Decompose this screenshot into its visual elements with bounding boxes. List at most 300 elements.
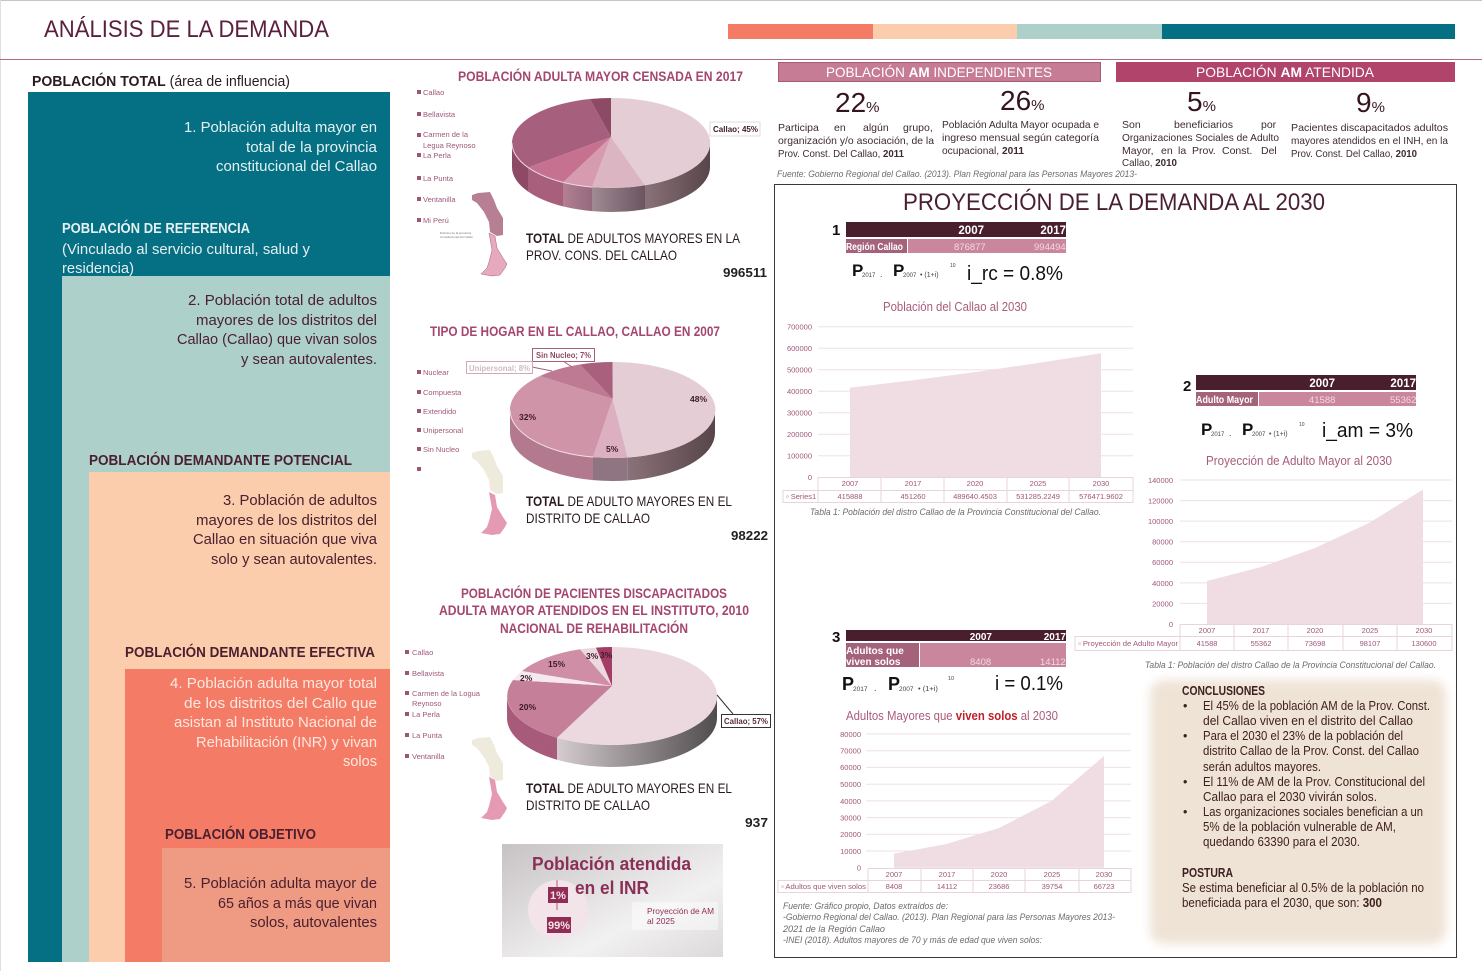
conclusions list: Para el 2030 el 23% de la población del: [1203, 729, 1403, 743]
stat 22%: grupo,: [903, 122, 933, 134]
area chart 1: 2020: [967, 479, 983, 488]
map of Callao: Distritos de la provincia: [440, 231, 471, 235]
legend: Extendido: [423, 407, 456, 416]
area chart 3: 14112: [937, 882, 957, 891]
data labels: 15%: [548, 659, 565, 669]
legend: La Punta: [423, 174, 454, 183]
formula 2: .: [1229, 428, 1232, 438]
heading: población total: POBLACIÓN TOTAL (área de influencia): [32, 72, 290, 90]
banner: POBLACIÓN AM ATENDIDA: [1196, 64, 1375, 80]
chart title: POBLACIÓN DE PACIENTES DISCAPACITADOS: [461, 586, 727, 601]
conclusions list: •: [1183, 729, 1187, 743]
area chart 2: 140000: [1148, 476, 1173, 485]
block: población demandante efectiva: POBLACIÓN OBJETIVO: [165, 825, 316, 843]
legend: Callao: [423, 88, 444, 97]
area chart 3: 8408: [886, 882, 902, 891]
legend: La Perla: [412, 710, 441, 719]
stat 5%: [1122, 86, 1279, 169]
formula 1: 10: [950, 263, 956, 269]
area chart 2: [1075, 476, 1452, 650]
data table 2: 2017: [1390, 378, 1416, 390]
stat 26%: 26%: [1000, 85, 1044, 116]
stat 5%: Son: [1122, 119, 1141, 131]
area chart 2: ▫ Proyección de Adulto Mayor: [1078, 639, 1178, 648]
stat 5%: Del: [1261, 145, 1277, 157]
formula 3: 2017: [853, 686, 868, 693]
card legend: Proyección de AM: [647, 906, 714, 916]
total text: DISTRITO DE CALLAO: [526, 510, 650, 526]
data table 3: 2007: [970, 632, 992, 643]
total text: 996511: [723, 265, 767, 280]
legend: Compuesta: [423, 388, 462, 397]
area chart 3: 20000: [840, 830, 861, 839]
stat 22%: algún: [863, 122, 889, 134]
area chart 1: 0: [808, 473, 812, 482]
data labels: 32%: [519, 412, 536, 422]
block: población demandante efectiva: asistan al Instituto Nacional de: [174, 715, 377, 731]
data table 3: 2017: [1044, 632, 1066, 643]
area chart 3: 66723: [1094, 882, 1114, 891]
panel: pacientes discapacitados: [405, 586, 770, 830]
block: población demandante potencial: 3. Población de adultos: [223, 493, 377, 509]
legend: Ventanilla: [412, 752, 445, 761]
postura: POSTURA: [1182, 866, 1233, 880]
card legend: [632, 902, 718, 930]
stat 9%: [1291, 87, 1448, 160]
area chart 3: 23686: [989, 882, 1009, 891]
area chart 1: 531285.2249: [1016, 492, 1060, 501]
panel: tipo de hogar: [417, 324, 768, 543]
3d pie chart: [512, 98, 760, 212]
area chart 1: 200000: [787, 430, 812, 439]
data table 1: 876877: [954, 242, 986, 253]
area chart 2: 2020: [1307, 626, 1323, 635]
data labels: [519, 650, 613, 712]
area chart 2: 98107: [1360, 639, 1380, 648]
colour strip: [728, 24, 1455, 39]
conclusions list: [1182, 684, 1430, 849]
postura: beneficiada para el 2030, que son: 300: [1182, 896, 1382, 910]
banner: [778, 62, 1100, 82]
callout: callao: Callao; 57%: [724, 716, 768, 726]
rate 1: i_rc = 0.8%: [967, 263, 1063, 285]
block: población objetivo: [162, 848, 390, 962]
formula 2: 2007: [1252, 432, 1266, 438]
block: población total: (Vinculado al servicio cultural, salud y: [62, 242, 311, 258]
card pie: [528, 880, 588, 940]
area chart 2: 60000: [1152, 558, 1173, 567]
data table 2: 2007: [1309, 378, 1335, 390]
table caption: Tabla 1: Población del distro Callao de la Provincia Constitucional del Callao.: [810, 507, 1101, 518]
area chart 3: 2007: [886, 870, 902, 879]
source text: -INEI (2018). Adultos mayores de 70 y más de edad que viven solos:: [783, 935, 1042, 946]
heading: PROYECCIÓN DE LA DEMANDA AL 2030: [903, 189, 1325, 216]
postura: Se estima beneficiar al 0.5% de la población no: [1182, 881, 1424, 895]
total text: [526, 230, 767, 280]
data labels: 5%: [606, 444, 619, 454]
stat 22%: Participa: [778, 122, 819, 134]
legend: Ventanilla: [423, 195, 456, 204]
area chart 1: 415888: [837, 492, 863, 501]
label 1%: [548, 887, 568, 903]
formula 1: .: [880, 269, 883, 279]
data table 2: 55362: [1390, 395, 1416, 406]
chart title: Población del Callao al 2030: [883, 300, 1027, 314]
block: población de referencia: mayores de los distritos del: [196, 313, 377, 329]
conclusions list: •: [1183, 775, 1187, 789]
total text: TOTAL DE ADULTOS MAYORES EN LA: [526, 230, 741, 246]
formula 3: P: [888, 674, 900, 694]
formula 3: 2007: [899, 686, 914, 693]
block: población de referencia: 2. Población total de adultos: [188, 293, 377, 309]
area chart 3: 80000: [840, 730, 861, 739]
block: población demandante potencial: POBLACIÓN DEMANDANTE EFECTIVA: [125, 643, 375, 661]
card: población atendida en el INR: [502, 844, 723, 957]
conclusions list: 5% de la población vulnerable de AM,: [1203, 820, 1396, 834]
stat 26%: ocupacional, 2011: [942, 145, 1024, 157]
data table 3: 8408: [970, 657, 991, 668]
legend: [405, 648, 481, 761]
section 3: [778, 629, 1131, 946]
map of Callao: [440, 192, 507, 276]
conclusions list: El 11% de AM de la Prov. Constitucional del: [1203, 775, 1425, 789]
area chart 3: 2017: [939, 870, 955, 879]
callout: unipersonal: [466, 362, 552, 374]
formula 3: 10: [948, 676, 954, 682]
area chart 1: 400000: [787, 387, 812, 396]
formula 1: 2007: [903, 273, 917, 279]
stat 5%: Mayor,: [1122, 145, 1154, 157]
callout: sin núcleo: Sin Nucleo; 7%: [536, 350, 591, 360]
label 99%: 99%: [548, 920, 570, 932]
formula 3: P: [842, 674, 854, 694]
conclusions list: serán adultos mayores.: [1203, 760, 1321, 774]
block: población total: total de la provincia: [246, 140, 378, 156]
data labels: 20%: [519, 702, 536, 712]
data table 3: viven solos: [846, 657, 901, 668]
block: población de referencia: Callao (Callao) que vivan solos: [177, 332, 377, 348]
chart title: TIPO DE HOGAR EN EL CALLAO, CALLAO EN 2007: [430, 324, 720, 339]
formula 1: P: [852, 261, 863, 280]
legend: Bellavista: [412, 669, 445, 678]
stat 26%: ingreso mensual según categoría: [942, 132, 1099, 144]
block: población total: POBLACIÓN DE REFERENCIA: [62, 219, 250, 237]
area chart 3: 70000: [840, 746, 861, 756]
formula 1: • (1+i): [920, 272, 939, 279]
callout: callao: [717, 695, 770, 728]
area chart 2: 80000: [1152, 538, 1173, 546]
stat 5%: beneficiarios: [1174, 119, 1233, 131]
block: población total: residencia): [62, 261, 134, 277]
panel: nested population funnel: [28, 72, 390, 962]
area chart 2: 2025: [1362, 626, 1378, 635]
block: población de referencia: POBLACIÓN DEMANDANTE POTENCIAL: [89, 451, 352, 469]
label 1%: 1%: [550, 890, 566, 902]
stat 22%: 22%: [835, 87, 880, 118]
block: población demandante potencial: Callao en situación que viva: [193, 532, 378, 548]
source text: [782, 901, 1115, 946]
block: población total: constitucional del Callao: [216, 159, 377, 175]
legend: Nuclear: [423, 368, 449, 377]
conclusions list: del Callao viven en el distrito del Callao: [1203, 714, 1413, 728]
area chart 1: 451260: [900, 492, 926, 501]
data table 3: 3: [832, 629, 840, 646]
legend: Carmen de la: [423, 130, 469, 139]
area chart 2: 2017: [1253, 626, 1269, 635]
area chart 3: 2025: [1044, 870, 1060, 879]
area chart 1: 100000: [787, 452, 812, 460]
total text: 937: [745, 815, 768, 830]
area chart 3: 30000: [840, 814, 861, 822]
data table 1: 2007: [958, 225, 984, 237]
area chart 2: 100000: [1148, 517, 1173, 526]
area chart 1: 2017: [905, 479, 921, 488]
formula 2: 10: [1299, 422, 1305, 428]
stat 22%: organización y/o asociación, de la: [778, 135, 934, 147]
block: población total: 1. Población adulta mayor en: [184, 120, 377, 136]
area chart 3: 39754: [1042, 882, 1062, 891]
conclusions list: distrito Callao de la Prov. Const. del Callao: [1203, 744, 1419, 758]
stat 5%: en: [1161, 145, 1173, 157]
block: población demandante efectiva: solos: [343, 754, 377, 770]
total text: TOTAL DE ADULTO MAYORES EN EL: [526, 493, 732, 509]
area chart 2: 0: [1169, 620, 1173, 629]
conclusions list: Las organizaciones sociales benefician a un: [1203, 805, 1423, 819]
total text: TOTAL DE ADULTO MAYORES EN EL: [526, 780, 732, 796]
callout: [710, 122, 760, 136]
block: población objetivo: solos, autovalentes: [250, 915, 377, 931]
formula 3: [842, 674, 954, 694]
stat 26%: Población Adulta Mayor ocupada e: [942, 119, 1099, 131]
stat 22%: [778, 87, 934, 160]
map of Callao district: [472, 450, 507, 535]
block: población total: [28, 92, 390, 962]
stat 26%: [942, 85, 1099, 157]
callout: Callao; 45%: [713, 124, 758, 134]
area chart 2: 55362: [1251, 639, 1271, 648]
total text: [526, 493, 768, 543]
area chart 1: ▫ Series1: [786, 492, 816, 501]
data table 1: 1: [832, 222, 840, 239]
formula 1: [852, 261, 956, 280]
area chart 3: 60000: [840, 763, 861, 772]
stat 9%: Prov. Const. Del Callao, 2010: [1291, 148, 1417, 160]
legend: Carmen de la Logua: [412, 689, 481, 698]
area chart 2: 120000: [1148, 496, 1173, 506]
formula 3: • (1+i): [918, 684, 938, 693]
total text: PROV. CONS. DEL CALLAO: [526, 247, 677, 263]
area chart 2: 41588: [1197, 639, 1217, 648]
chart title: NACIONAL DE REHABILITACIÓN: [500, 621, 688, 636]
panel: población AM atendida: [1116, 62, 1455, 169]
section 1: [783, 222, 1133, 518]
callout: unipersonal: Unipersonal; 8%: [469, 363, 530, 373]
block: población demandante efectiva: 4. Población adulta mayor total: [170, 676, 377, 692]
area chart 1: 700000: [787, 322, 812, 332]
block: población demandante efectiva: de los distritos del Callo que: [184, 696, 377, 712]
area chart 2: 130600: [1411, 639, 1437, 648]
area chart 3: 10000: [840, 847, 861, 856]
conclusions list: •: [1183, 805, 1187, 819]
area chart 3: 2020: [991, 870, 1007, 879]
legend: Legua Reynoso: [423, 141, 476, 150]
area chart 1: 600000: [787, 344, 812, 353]
block: población demandante efectiva: Rehabilitación (INR) y vivan: [196, 735, 377, 751]
callout: sin núcleo: [532, 348, 594, 367]
legend: La Perla: [423, 151, 452, 160]
section 2: [1075, 375, 1452, 671]
data labels: 2%: [520, 673, 533, 683]
conclusions list: quedando 63390 para el 2030.: [1203, 835, 1360, 849]
block: población demandante efectiva: [125, 669, 390, 962]
card legend: al 2025: [647, 916, 675, 926]
panel: conclusiones: [1150, 680, 1446, 944]
conclusions list: •: [1183, 699, 1187, 713]
data table 1: [832, 222, 1066, 253]
data table 3: [832, 629, 1066, 668]
stat 5%: Const.: [1222, 145, 1252, 157]
chart title: POBLACIÓN ADULTA MAYOR CENSADA EN 2017: [458, 69, 743, 84]
data table 3: 14112: [1040, 657, 1066, 668]
legend: Reynoso: [412, 699, 442, 708]
block: población demandante potencial: [89, 472, 390, 962]
source text: -Gobierno Regional del Callao. (2013). Plan Regional para las Personas Mayores 2013-: [783, 912, 1115, 923]
banner: POBLACIÓN AM INDEPENDIENTES: [826, 64, 1052, 80]
rate 3: i = 0.1%: [995, 673, 1063, 695]
legend: Bellavista: [423, 110, 456, 119]
legend: Sin Nucleo: [423, 445, 459, 454]
stat 9%: Pacientes discapacitados adultos: [1291, 122, 1448, 134]
stat 9%: 9%: [1356, 87, 1385, 118]
block: población demandante potencial: solo y sean autovalentes.: [211, 552, 377, 568]
source note: Fuente: Gobierno Regional del Callao. (2013). Plan Regional para las Personas Mayores 2013-: [777, 169, 1137, 180]
area chart 1: 2007: [842, 479, 858, 488]
stat 22%: Prov. Const. Del Callao, 2011: [778, 148, 904, 160]
source text: 2021 de la Región Callao: [782, 924, 885, 935]
data labels: 3%: [600, 650, 613, 660]
area chart 3: 50000: [840, 780, 861, 789]
area chart 1: 2030: [1093, 479, 1109, 488]
formula 1: 2017: [862, 273, 876, 279]
block: población de referencia: [62, 276, 390, 962]
stat 5%: la: [1178, 145, 1186, 157]
area chart 2: 20000: [1152, 600, 1173, 608]
chart title: Proyección de Adulto Mayor al 2030: [1206, 454, 1392, 468]
legend: [417, 368, 463, 471]
data table 2: 41588: [1309, 395, 1335, 406]
chart title: ADULTA MAYOR ATENDIDOS EN EL INSTITUTO, 2010: [439, 603, 749, 618]
panel: población adulta mayor censada: [417, 69, 767, 280]
3d pie chart: [507, 647, 770, 767]
area chart 3: ▫ Adultos que viven solos: [781, 882, 866, 891]
area chart 1: 576471.9602: [1079, 492, 1123, 501]
block: población objetivo: 5. Población adulta mayor de: [184, 876, 377, 892]
block: población demandante potencial: mayores de los distritos del: [196, 513, 377, 529]
formula 2: P: [1201, 420, 1212, 439]
3d pie chart: [466, 348, 715, 481]
area chart 1: 2025: [1030, 479, 1046, 488]
area chart 3: 2030: [1096, 870, 1112, 879]
data labels: 3%: [586, 651, 599, 661]
formula 2: P: [1242, 420, 1253, 439]
data table 3: Adultos que: [846, 646, 904, 657]
conclusions list: El 45% de la población AM de la Prov. Const.: [1203, 699, 1430, 713]
stat 22%: en: [834, 122, 846, 134]
data table 1: 994494: [1034, 242, 1066, 253]
area chart 3: 40000: [840, 797, 861, 806]
postura: [1182, 866, 1424, 910]
stat 5%: por: [1261, 119, 1277, 131]
area chart 1: [783, 322, 1133, 502]
legend: Callao: [412, 648, 433, 657]
legend: Unipersonal: [423, 426, 463, 435]
area chart 2: 40000: [1152, 579, 1173, 588]
area chart 2: 2030: [1416, 626, 1432, 635]
legend: Mi Perú: [423, 216, 449, 225]
formula 2: • (1+i): [1269, 431, 1288, 438]
map of Callao district: [472, 737, 507, 820]
total text: [526, 780, 768, 830]
table caption: Tabla 1: Población del distro Callao de la Provincia Constitucional del Callao.: [1145, 660, 1436, 671]
block: población de referencia: y sean autovalentes.: [241, 352, 377, 368]
panel: población AM independientes: [778, 62, 1100, 160]
legend: [417, 88, 476, 225]
formula 2: 2017: [1211, 432, 1225, 438]
conclusions list: CONCLUSIONES: [1182, 684, 1265, 698]
data labels: [519, 394, 707, 454]
area chart 1: 300000: [787, 408, 812, 418]
area chart 3: [778, 730, 1131, 892]
formula 2: [1201, 420, 1305, 439]
stat 5%: Callao, 2010: [1122, 157, 1177, 169]
data table 2: 2: [1183, 378, 1191, 395]
title: ANÁLISIS DE LA DEMANDA: [44, 16, 329, 43]
area chart 2: 73698: [1305, 639, 1325, 648]
data table 2: Adulto Mayor: [1196, 395, 1253, 406]
conclusions list: Callao para el 2030 vivirán solos.: [1203, 790, 1377, 804]
area chart 3: 0: [857, 864, 861, 872]
stat 5%: Prov.: [1192, 145, 1216, 157]
chart title: Adultos Mayores que viven solos al 2030: [846, 709, 1058, 723]
data table 1: 2017: [1040, 225, 1066, 237]
source text: Fuente: Gráfico propio, Datos extraídos de:: [783, 901, 948, 912]
data labels: 48%: [690, 394, 707, 404]
stat 5%: 5%: [1187, 86, 1216, 117]
card title: [532, 854, 692, 898]
panel: proyección de la demanda: [774, 184, 1456, 958]
legend: La Punta: [412, 731, 443, 740]
area chart 1: 500000: [787, 366, 812, 374]
data table 1: Región Callao: [846, 242, 903, 253]
total text: 98222: [731, 528, 768, 543]
map of Callao: Constitucional del Callao: [440, 235, 473, 239]
card title: en el INR: [575, 878, 649, 898]
card title: Población atendida: [532, 854, 692, 874]
block: población objetivo: 65 años a más que vivan: [218, 896, 377, 912]
formula 1: P: [893, 261, 904, 280]
banner: [1116, 62, 1455, 82]
data table 2: [1183, 375, 1416, 406]
chart title: [439, 586, 749, 636]
total text: DISTRITO DE CALLAO: [526, 797, 650, 813]
stat 9%: mayores atendidos en el INH, en la: [1291, 135, 1448, 147]
area chart 1: 489640.4503: [953, 492, 997, 501]
label 99%: [547, 917, 571, 933]
stat 5%: Organizaciones Sociales de Adulto: [1122, 132, 1279, 144]
formula 3: .: [874, 683, 877, 693]
rate 2: i_am = 3%: [1322, 420, 1413, 442]
area chart 2: 2007: [1199, 626, 1215, 635]
